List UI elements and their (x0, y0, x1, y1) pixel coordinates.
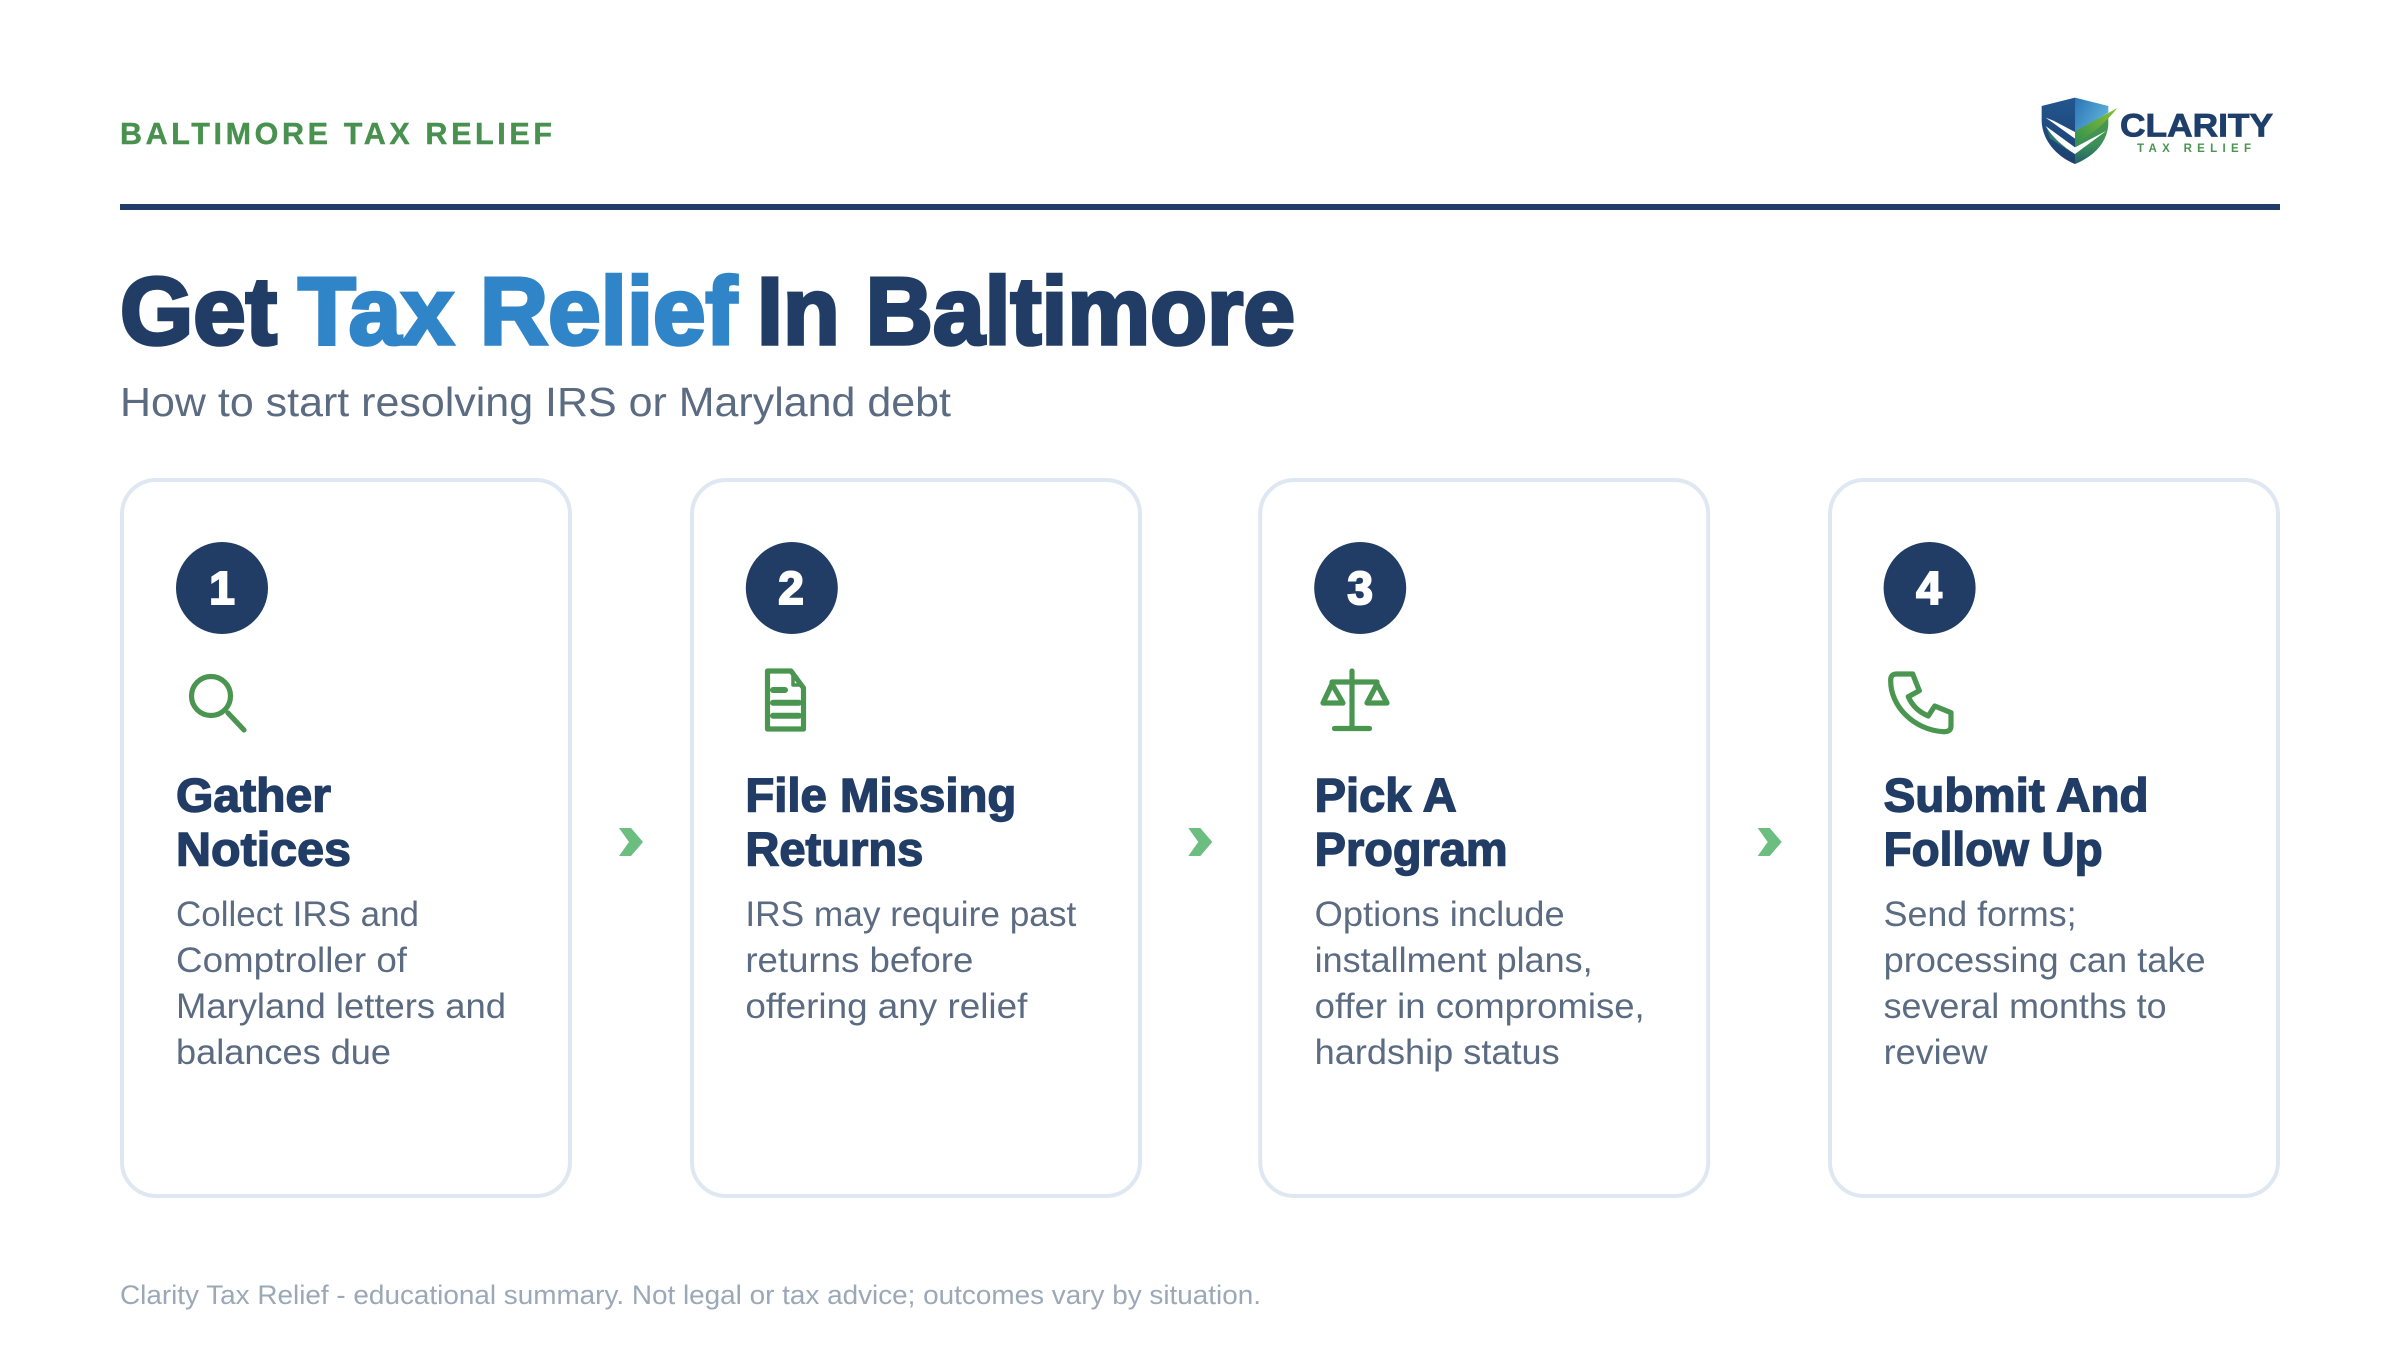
panel: step 1 gather notices (122, 480, 570, 1196)
description step 1: Collect IRS and (176, 895, 419, 934)
subtitle: How to start resolving IRS or Maryland debt (120, 379, 952, 425)
description step 3: offer in compromise, (1315, 987, 1645, 1026)
header rule (120, 204, 2280, 210)
description step 4: processing can take (1884, 941, 2206, 980)
description step 2: returns before (745, 941, 973, 980)
step number 2: 2 (778, 562, 804, 614)
arrow 2 (1188, 828, 1212, 856)
logo tagline: TAX RELIEF (2137, 143, 2251, 155)
title: Tax Relief (298, 258, 738, 365)
heading: Pick A Program (1315, 768, 1508, 876)
logo wordmark: CLARITY (2120, 108, 2273, 144)
panel: step 3 pick a program (1260, 480, 1708, 1196)
step number 2 (746, 542, 838, 634)
panel: step 4 submit and follow up (1830, 480, 2278, 1196)
icon: magnifying glass (192, 676, 244, 730)
title (120, 258, 1295, 365)
description step 3 (1315, 895, 1645, 1072)
heading: Pick A Program: Program (1315, 822, 1508, 876)
icon: telephone (1891, 674, 1951, 732)
logo: Clarity Tax Relief (2042, 98, 2273, 164)
icon: balance scales (1323, 671, 1387, 728)
heading: Gather Notices: Notices (176, 822, 351, 876)
description step 1: Maryland letters and (176, 987, 506, 1026)
description step 1: balances due (176, 1033, 391, 1072)
icon: shield with check (2042, 98, 2117, 164)
icon: document (768, 671, 804, 729)
step number 3 (1314, 542, 1406, 634)
footer disclaimer: Clarity Tax Relief - educational summary. Not legal or tax advice; outcomes vary by situation. (120, 1280, 1261, 1310)
panel: step 2 file missing returns (692, 480, 1140, 1196)
title: Get (120, 258, 277, 365)
heading: Gather Notices (176, 768, 351, 876)
description step 3: hardship status (1315, 1033, 1560, 1072)
description step 2: IRS may require past (745, 895, 1077, 934)
description step 3: Options include (1315, 895, 1565, 934)
description step 3: installment plans, (1315, 941, 1593, 980)
heading: Pick A Program: Pick A (1315, 768, 1457, 822)
title: In Baltimore (757, 258, 1295, 365)
step number 4 (1884, 542, 1976, 634)
step number 1 (176, 542, 268, 634)
description step 2 (745, 895, 1077, 1026)
step number 3: 3 (1347, 562, 1373, 614)
step number 1: 1 (209, 562, 235, 614)
arrow 3 (1758, 828, 1782, 856)
heading: File Missing Returns (745, 768, 1016, 876)
eyebrow: Baltimore Tax Relief: BALTIMORE TAX RELIEF (120, 117, 552, 151)
description step 1 (176, 895, 506, 1072)
step number 4: 4 (1916, 562, 1942, 614)
heading: File Missing Returns: Returns (745, 822, 923, 876)
heading: File Missing Returns: File Missing (745, 768, 1016, 822)
arrow 1 (619, 828, 643, 856)
heading: Submit And Follow Up (1884, 768, 2149, 876)
heading: Gather Notices: Gather (176, 768, 331, 822)
description step 4: review (1884, 1033, 1988, 1072)
description step 4: several months to (1884, 987, 2167, 1026)
description step 4: Send forms; (1884, 895, 2077, 934)
heading: Submit And Follow Up: Follow Up (1884, 822, 2103, 876)
heading: Submit And Follow Up: Submit And (1884, 768, 2149, 822)
description step 4 (1884, 895, 2206, 1072)
description step 1: Comptroller of (176, 941, 407, 980)
description step 2: offering any relief (745, 987, 1028, 1026)
